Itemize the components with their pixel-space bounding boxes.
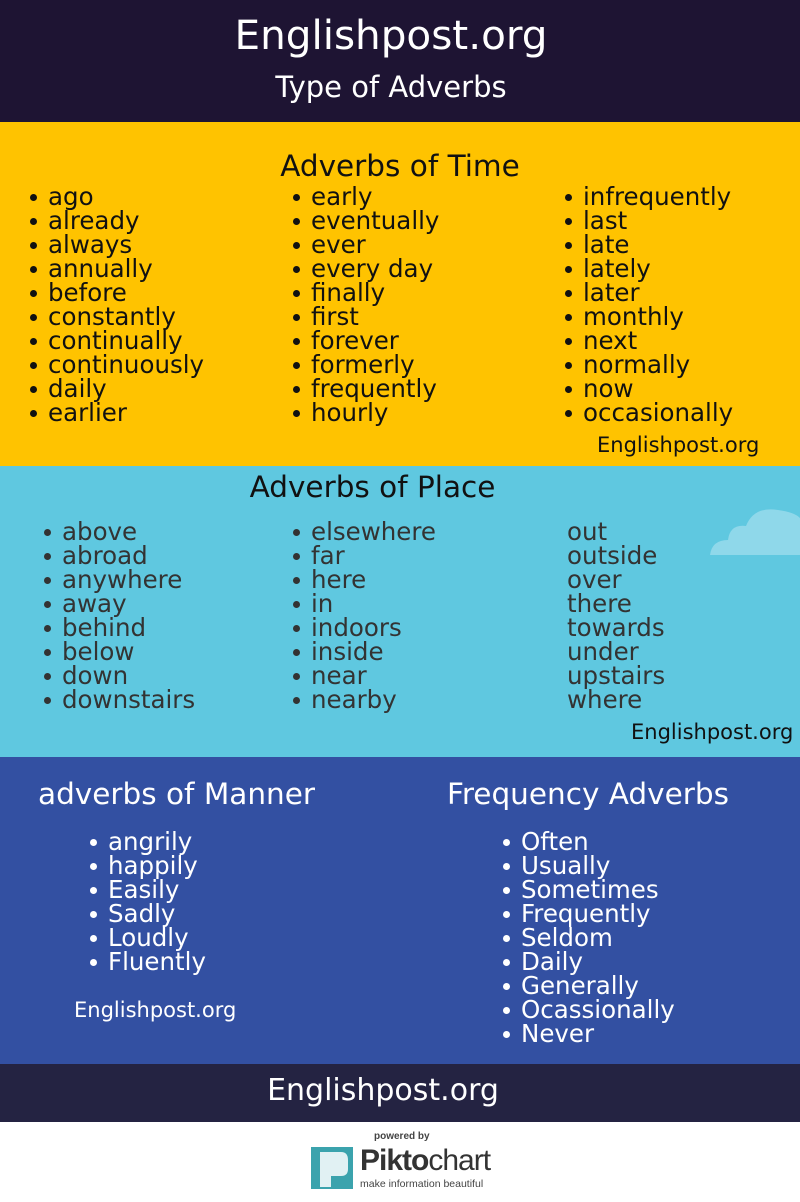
list: manner: angrily bbox=[108, 827, 192, 856]
list: place col 1: above bbox=[62, 517, 137, 546]
list: place col 3: upstairs bbox=[567, 661, 665, 690]
list: time col 2 bbox=[293, 182, 439, 427]
list: time col 1: daily bbox=[48, 374, 107, 403]
footer text: Englishpost.org bbox=[267, 1073, 499, 1108]
footer bbox=[0, 1064, 800, 1122]
list: place col 3: where bbox=[567, 685, 642, 714]
list: time col 3: infrequently bbox=[583, 182, 731, 211]
list: time col 2: first bbox=[311, 302, 359, 331]
list: frequency bbox=[503, 827, 675, 1048]
list: time col 2: formerly bbox=[311, 350, 415, 379]
list: time col 1: earlier bbox=[48, 398, 127, 427]
list: place col 2: indoors bbox=[311, 613, 402, 642]
list: time col 1: always bbox=[48, 230, 132, 259]
list: manner: Easily bbox=[108, 875, 179, 904]
list: time col 1: constantly bbox=[48, 302, 176, 331]
list: time col 3: late bbox=[583, 230, 630, 259]
list: place col 3: over bbox=[567, 565, 622, 594]
wordmark: Piktochart bbox=[360, 1144, 490, 1177]
list: place col 3: under bbox=[567, 637, 639, 666]
list: time col 1: annually bbox=[48, 254, 153, 283]
list: place col 1 bbox=[44, 517, 195, 714]
list: place col 3: outside bbox=[567, 541, 657, 570]
list: place col 2: in bbox=[311, 589, 333, 618]
list: time col 2: every day bbox=[311, 254, 433, 283]
icon: logo mark bbox=[311, 1147, 353, 1189]
list: manner: Loudly bbox=[108, 923, 189, 952]
list: frequency: Ocassionally bbox=[521, 995, 675, 1024]
list: place col 1: down bbox=[62, 661, 128, 690]
list: frequency: Daily bbox=[521, 947, 583, 976]
list: time col 2: eventually bbox=[311, 206, 439, 235]
list: time col 3: monthly bbox=[583, 302, 684, 331]
panel: manner and frequency bbox=[0, 757, 800, 1064]
list: place col 3: out bbox=[567, 517, 607, 546]
piktochart logo bbox=[311, 1131, 491, 1190]
list: place col 2: nearby bbox=[311, 685, 397, 714]
panel: adverbs of time bbox=[0, 122, 800, 466]
list: frequency: Often bbox=[521, 827, 589, 856]
list: time col 3: normally bbox=[583, 350, 690, 379]
heading: time: Adverbs of Time bbox=[280, 149, 520, 183]
list: frequency: Frequently bbox=[521, 899, 651, 928]
list: time col 2: early bbox=[311, 182, 372, 211]
heading: manner: adverbs of Manner bbox=[38, 777, 315, 811]
list: place col 2: elsewhere bbox=[311, 517, 436, 546]
list: place col 2: far bbox=[311, 541, 345, 570]
list: time col 2: frequently bbox=[311, 374, 437, 403]
watermark: Englishpost.org bbox=[597, 433, 759, 457]
list: manner: Sadly bbox=[108, 899, 175, 928]
list: place col 1: away bbox=[62, 589, 127, 618]
list: time col 2: ever bbox=[311, 230, 366, 259]
list: time col 1: ago bbox=[48, 182, 94, 211]
tagline: make information beautiful bbox=[360, 1178, 483, 1190]
list: place col 3: towards bbox=[567, 613, 665, 642]
list: place col 2: inside bbox=[311, 637, 384, 666]
list: frequency: Generally bbox=[521, 971, 639, 1000]
list: place col 3 bbox=[567, 517, 665, 714]
list: time col 1: continuously bbox=[48, 350, 204, 379]
list: place col 2 bbox=[293, 517, 436, 714]
list: time col 3: next bbox=[583, 326, 637, 355]
list: time col 2: finally bbox=[311, 278, 385, 307]
powered by: powered by bbox=[374, 1131, 430, 1142]
icon: cloud bbox=[710, 509, 800, 555]
list: place col 1: below bbox=[62, 637, 134, 666]
list: frequency: Seldom bbox=[521, 923, 613, 952]
list: place col 1: behind bbox=[62, 613, 146, 642]
list: place col 3: there bbox=[567, 589, 632, 618]
list: time col 3: last bbox=[583, 206, 627, 235]
subtitle: Type of Adverbs bbox=[275, 70, 507, 104]
watermark: Englishpost.org bbox=[631, 720, 793, 744]
list: manner: happily bbox=[108, 851, 198, 880]
watermark: Englishpost.org bbox=[74, 998, 236, 1022]
list: time col 1: already bbox=[48, 206, 140, 235]
list: time col 3: later bbox=[583, 278, 640, 307]
list: frequency: Sometimes bbox=[521, 875, 659, 904]
list: frequency: Usually bbox=[521, 851, 610, 880]
list: place col 2: near bbox=[311, 661, 367, 690]
title: Englishpost.org bbox=[234, 11, 548, 59]
heading: frequency: Frequency Adverbs bbox=[447, 777, 729, 811]
panel: adverbs of place bbox=[0, 466, 800, 757]
list: time col 3: now bbox=[583, 374, 634, 403]
list: time col 3: occasionally bbox=[583, 398, 733, 427]
list: time col 2: hourly bbox=[311, 398, 388, 427]
header bbox=[0, 0, 800, 122]
heading: place: Adverbs of Place bbox=[250, 470, 495, 504]
list: time col 1: continually bbox=[48, 326, 183, 355]
list: manner bbox=[90, 827, 206, 976]
list: time col 3 bbox=[565, 182, 733, 427]
list: place col 2: here bbox=[311, 565, 366, 594]
list: place col 1: downstairs bbox=[62, 685, 195, 714]
list: time col 3: lately bbox=[583, 254, 651, 283]
list: time col 2: forever bbox=[311, 326, 399, 355]
list: time col 1 bbox=[30, 182, 204, 427]
list: frequency: Never bbox=[521, 1019, 594, 1048]
list: time col 1: before bbox=[48, 278, 127, 307]
list: manner: Fluently bbox=[108, 947, 206, 976]
list: place col 1: abroad bbox=[62, 541, 148, 570]
list: place col 1: anywhere bbox=[62, 565, 182, 594]
